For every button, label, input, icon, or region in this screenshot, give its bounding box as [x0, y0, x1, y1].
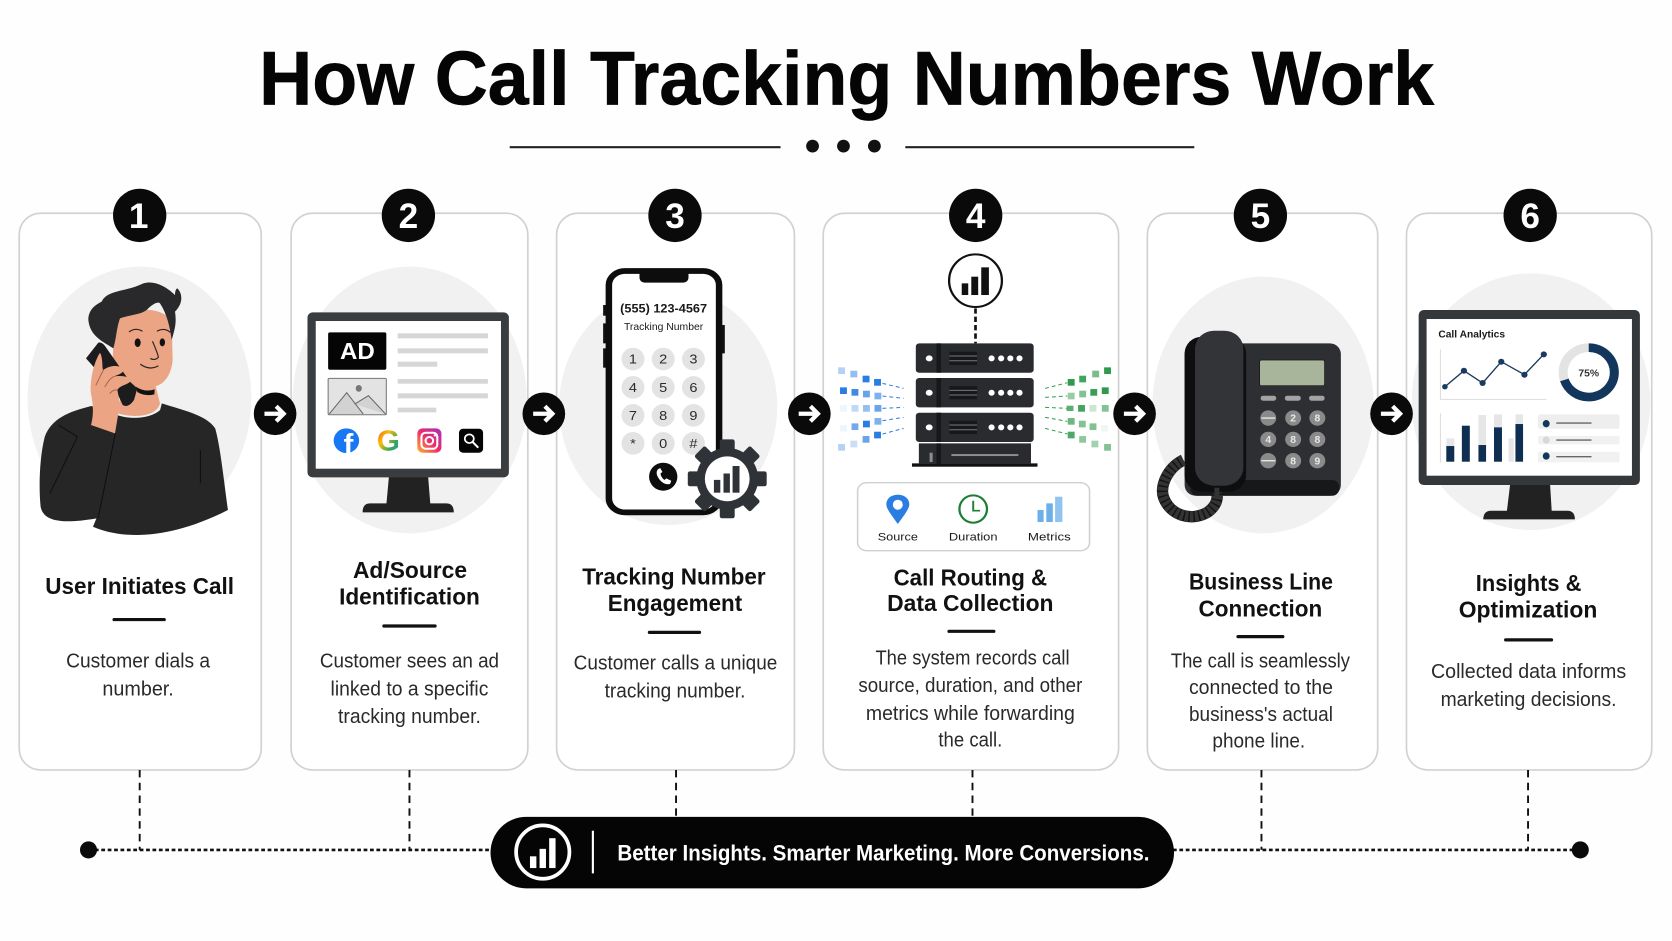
- illustration: smartphone keypad: Tracking Number: [624, 323, 704, 333]
- step number badge: 2: [399, 197, 418, 236]
- legend list: [1538, 414, 1620, 462]
- step number badge: 5: [1251, 197, 1270, 236]
- illustration: ad monitor: [293, 267, 527, 533]
- heading: Optimization: [1459, 596, 1597, 622]
- icon: location pin: [886, 495, 909, 524]
- illustration: smartphone keypad: 7: [629, 409, 637, 423]
- arrow: step 1 to 2: [254, 392, 296, 435]
- description: business's actual: [1189, 704, 1333, 726]
- metrics legend box: Duration: [949, 530, 998, 543]
- metrics legend box: [858, 483, 1090, 551]
- step number badge: 6: [1520, 197, 1540, 236]
- metrics legend box: Source: [878, 530, 918, 543]
- description: [574, 653, 777, 702]
- description: The call is seamlessly: [1171, 651, 1351, 673]
- illustration: analytics monitor: [1412, 273, 1650, 530]
- title: How Call Tracking Numbers Work: [259, 37, 1435, 122]
- donut chart 75%: [1563, 348, 1614, 397]
- arrow: step 2 to 3: [522, 392, 565, 435]
- illustration: smartphone keypad: 1: [629, 353, 637, 366]
- illustration: desk phone: 8: [1290, 457, 1296, 467]
- heading: Business Line: [1189, 569, 1333, 595]
- panel: step 6 insights and optimization: [1406, 189, 1652, 770]
- panel: step 3 tracking number engagement: [557, 189, 794, 770]
- illustration: smartphone keypad: *: [630, 437, 637, 451]
- bar chart: [1440, 413, 1523, 463]
- heading: Data Collection: [887, 590, 1054, 616]
- description: tracking number.: [605, 680, 745, 702]
- description: [1431, 661, 1626, 711]
- icon: clock: [959, 495, 987, 523]
- step number badge: 3: [665, 197, 685, 236]
- title divider: [510, 140, 1194, 152]
- illustration: desk phone: 2: [1290, 414, 1296, 425]
- heading: Connection: [1199, 595, 1322, 621]
- heading: [582, 563, 766, 616]
- illustration: smartphone keypad: 3: [689, 353, 697, 366]
- description: metrics while forwarding: [866, 703, 1075, 725]
- description: tracking number.: [338, 706, 481, 728]
- data stream: blue left: [838, 367, 904, 451]
- illustration: desk phone: 9: [1314, 457, 1321, 467]
- illustration: ad monitor: AD: [340, 339, 375, 365]
- description: Collected data informs: [1431, 661, 1626, 683]
- icon: google: G: [377, 426, 400, 458]
- heading: Identification: [339, 584, 480, 610]
- description: Customer calls a unique: [574, 653, 777, 675]
- banner: key takeaway: Better Insights. Smarter Marketing. More Conversions.: [617, 841, 1150, 866]
- step number badge: [1504, 189, 1557, 242]
- description: phone line.: [1212, 731, 1305, 753]
- illustration: analytics monitor: Call Analytics: [1438, 330, 1505, 341]
- arrow: step 3 to 4: [788, 392, 831, 435]
- step number badge: [648, 189, 702, 242]
- illustration: smartphone keypad: 5: [659, 381, 667, 395]
- heading: Engagement: [608, 590, 742, 616]
- illustration: desk phone: 4: [1265, 435, 1271, 446]
- icon: analytics gear: [688, 439, 767, 518]
- icon: metrics bars: [1038, 497, 1062, 522]
- icon: signal in circle: [516, 825, 569, 879]
- step number badge: 1: [129, 197, 148, 236]
- illustration: smartphone keypad: 6: [689, 381, 697, 395]
- description: [1171, 651, 1351, 753]
- icon: instagram: [417, 428, 441, 453]
- description: Customer sees an ad: [320, 651, 499, 673]
- heading: User Initiates Call: [45, 573, 234, 599]
- icon: call button: [649, 463, 677, 491]
- icon: server rack: [912, 343, 1038, 467]
- icon: facebook: f: [344, 429, 354, 461]
- heading: Ad/Source: [353, 557, 467, 583]
- description: number.: [102, 678, 174, 700]
- arrow: step 4 to 5: [1113, 392, 1156, 435]
- description: linked to a specific: [331, 678, 488, 700]
- heading: [887, 564, 1054, 616]
- description: [66, 651, 211, 700]
- illustration: smartphone keypad: (555) 123-4567: [620, 302, 707, 315]
- description: connected to the: [1189, 677, 1333, 699]
- illustration: smartphone keypad: #: [689, 437, 698, 451]
- illustration: smartphone keypad: 2: [659, 353, 667, 366]
- icon: coiled cord: [1163, 460, 1219, 517]
- illustration: desk phone: 8: [1314, 435, 1321, 446]
- illustration: smartphone keypad: 4: [629, 381, 637, 395]
- banner: key takeaway: [491, 817, 1174, 888]
- step number badge: [382, 189, 435, 242]
- step number badge: 4: [966, 197, 986, 236]
- illustration: desk phone: 8: [1314, 414, 1321, 425]
- illustration: man on phone: [28, 267, 251, 535]
- donut chart 75%: 75%: [1578, 369, 1599, 380]
- panel: step 4 call routing and data collection: [823, 189, 1119, 770]
- panel: step 5 business line connection: [1147, 189, 1378, 770]
- arrow: step 5 to 6: [1370, 392, 1413, 435]
- description: source, duration, and other: [858, 675, 1083, 697]
- description: [320, 651, 499, 728]
- step number badge: [113, 189, 166, 242]
- timeline connectors: [80, 770, 1589, 858]
- step number badge: [1234, 189, 1287, 242]
- panel: step 1 user initiates call: [19, 189, 261, 770]
- illustration: smartphone keypad: [559, 271, 777, 525]
- description: [858, 647, 1083, 751]
- metrics legend box: Metrics: [1028, 530, 1071, 543]
- illustration: desk phone: 8: [1290, 435, 1296, 446]
- panel: step 2 ad source identification: [291, 189, 528, 770]
- illustration: smartphone keypad: 0: [659, 437, 668, 451]
- step number badge: [949, 189, 1002, 242]
- illustration: server with data streams: [838, 254, 1111, 551]
- description: The system records call: [875, 647, 1070, 669]
- heading: Insights &: [1476, 570, 1581, 596]
- data stream: green right: [1045, 367, 1111, 451]
- illustration: smartphone keypad: 8: [659, 409, 667, 423]
- illustration: desk phone: [1152, 277, 1374, 533]
- description: the call.: [938, 729, 1002, 751]
- heading: Tracking Number: [582, 563, 766, 589]
- heading: [339, 557, 480, 610]
- illustration: smartphone keypad: 9: [689, 409, 697, 423]
- heading: [1459, 570, 1597, 622]
- description: Customer dials a: [66, 651, 211, 673]
- icon: search: [459, 429, 483, 453]
- heading: [1189, 569, 1333, 621]
- icon: signal bubble: [949, 254, 1002, 343]
- heading: Call Routing &: [894, 564, 1047, 590]
- line chart: [1440, 349, 1547, 399]
- description: marketing decisions.: [1441, 689, 1617, 711]
- icon: facebook: [334, 428, 359, 461]
